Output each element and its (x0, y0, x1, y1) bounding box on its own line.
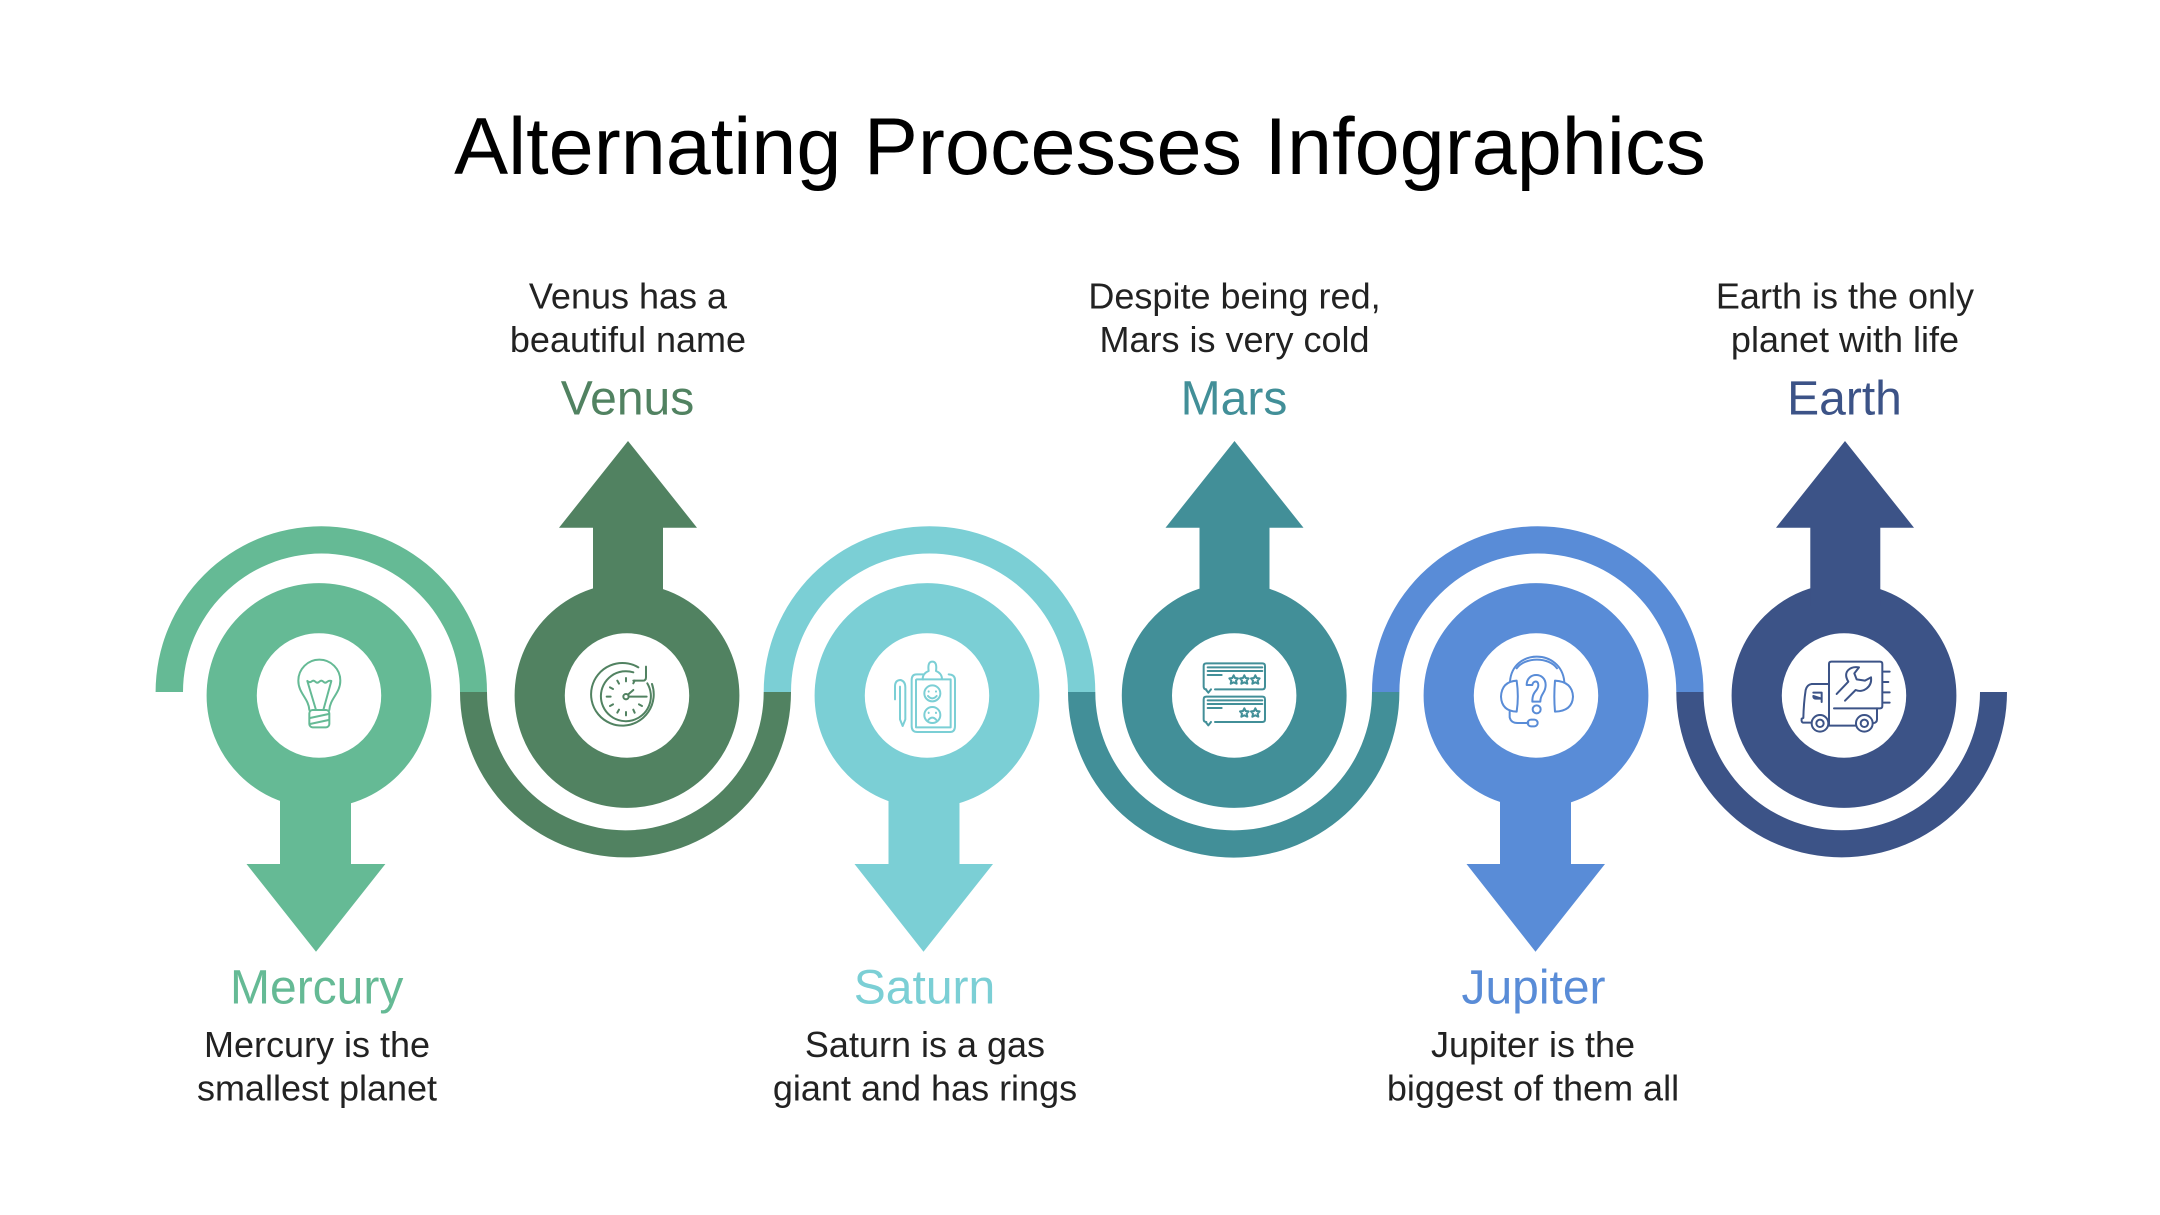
icon: repair truck (1802, 662, 1890, 732)
Jupiter name: Jupiter (1461, 962, 1606, 1014)
Venus name: Venus (561, 372, 694, 426)
Jupiter top arc (1372, 526, 1704, 692)
step: Mars (1068, 276, 1399, 858)
Saturn name: Saturn (854, 962, 995, 1014)
step: Jupiter (1372, 526, 1704, 1108)
Venus bottom arc (460, 692, 791, 857)
Mercury name: Mercury (230, 962, 403, 1014)
icon: light bulb (298, 660, 340, 727)
Saturn ring with down arrow (840, 608, 1014, 952)
icon: headset with question mark (1501, 657, 1573, 726)
Mars name: Mars (1181, 372, 1287, 426)
Saturn description: Saturn is a gas (805, 1024, 1045, 1065)
Earth description: planet with life (1731, 319, 1959, 360)
Jupiter description: Jupiter is the (1431, 1024, 1635, 1065)
Earth bottom arc (1676, 692, 2007, 857)
step: Earth (1676, 276, 2007, 857)
Mercury ring with down arrow (232, 608, 406, 952)
Mars bottom arc (1068, 692, 1399, 858)
step: Venus (460, 276, 791, 857)
Jupiter ring with down arrow (1449, 608, 1623, 952)
icon: clipboard with faces (895, 662, 955, 732)
Jupiter description: biggest of them all (1387, 1067, 1679, 1108)
Mars description: Mars is very cold (1099, 319, 1370, 360)
Saturn top arc (764, 526, 1095, 692)
Mars description: Despite being red, (1088, 276, 1381, 317)
Earth description: Earth is the only (1716, 276, 1974, 317)
Mercury description: smallest planet (197, 1067, 437, 1108)
Venus ring with up arrow (540, 441, 714, 783)
Venus description: Venus has a (529, 276, 728, 317)
step: Saturn (764, 526, 1095, 1108)
Mercury top arc (156, 526, 487, 692)
step: Mercury (156, 526, 487, 1108)
icon: clock (591, 663, 654, 726)
Venus description: beautiful name (510, 319, 746, 360)
title: Alternating Processes Infographics (454, 102, 1706, 192)
Earth name: Earth (1787, 372, 1902, 426)
Mercury description: Mercury is the (204, 1024, 430, 1065)
Mars ring with up arrow (1147, 441, 1321, 783)
Saturn description: giant and has rings (773, 1067, 1077, 1108)
icon: rating bubbles (1204, 663, 1265, 725)
Earth ring with up arrow (1757, 441, 1931, 783)
